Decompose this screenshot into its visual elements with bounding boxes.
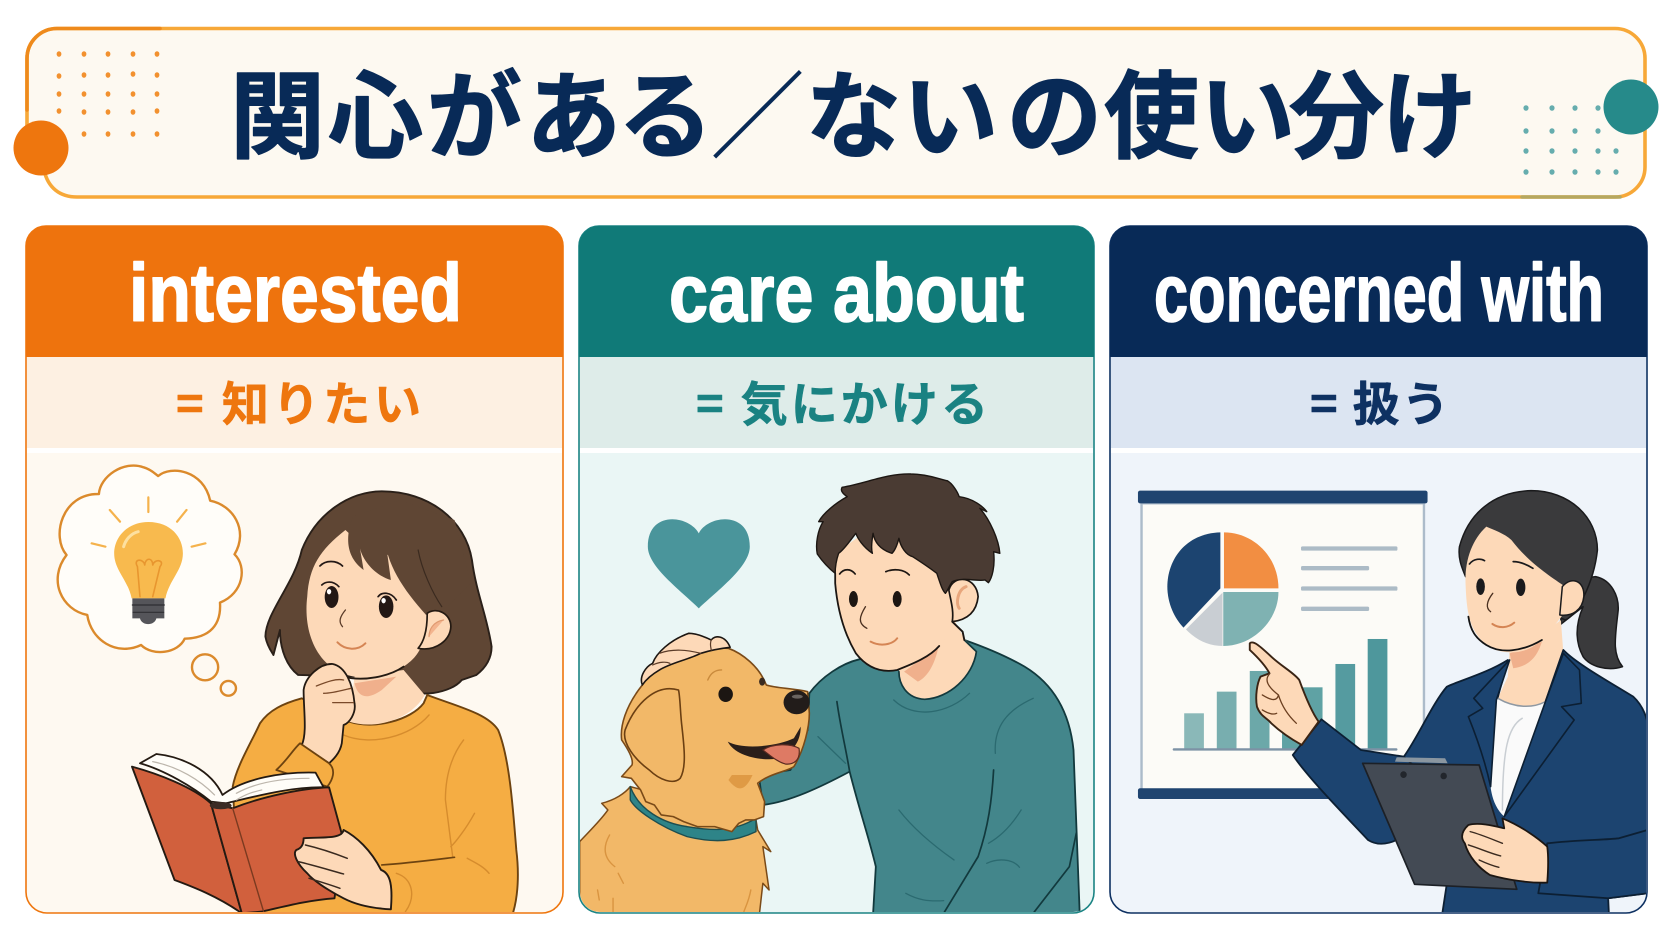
panel: interested	[26, 226, 563, 914]
ear	[418, 611, 451, 649]
meaning band	[580, 357, 1093, 448]
decorative dots left	[57, 51, 159, 137]
ear	[949, 579, 978, 622]
white shirt	[1489, 698, 1545, 817]
lower hand sleeve	[1538, 830, 1648, 898]
hair	[817, 474, 1000, 593]
meaning band	[1111, 357, 1646, 448]
pointing arm sleeve	[1293, 719, 1433, 844]
hair	[1459, 491, 1597, 620]
teal circle accent	[1604, 80, 1658, 134]
pie chart	[1167, 532, 1278, 646]
illustration: woman reading and thinking	[58, 466, 518, 914]
hand on chin	[302, 664, 355, 763]
panel: concerned with	[1110, 226, 1648, 914]
presentation screen	[1138, 491, 1428, 799]
header band	[579, 226, 1094, 357]
smile	[337, 642, 365, 649]
face	[1465, 527, 1565, 652]
neck	[349, 670, 425, 725]
jacket	[1404, 650, 1648, 914]
sweater	[759, 640, 1080, 914]
sweater	[233, 695, 518, 914]
text lines	[1301, 546, 1397, 611]
hair back	[265, 491, 492, 694]
clipboard	[1363, 757, 1517, 889]
heart icon	[648, 519, 750, 608]
collar	[630, 787, 756, 841]
neck	[1497, 620, 1563, 707]
title: 関心がある／ないの使い分け	[230, 41, 1477, 178]
eyes	[325, 586, 339, 608]
meaning band	[27, 357, 562, 448]
meaning text: = 扱う	[1310, 366, 1449, 435]
dog face	[718, 678, 810, 764]
meaning text: = 気にかける	[696, 366, 988, 435]
orange circle accent	[14, 120, 68, 176]
meaning text: = 知りたい	[176, 366, 421, 435]
dog head	[621, 648, 809, 832]
header band	[26, 226, 563, 357]
thought cloud with light bulb	[58, 466, 242, 696]
face	[306, 530, 427, 678]
hand on dog head	[641, 633, 730, 685]
heading: care about	[669, 248, 1024, 339]
eyes and mouth	[1469, 559, 1533, 627]
heading: interested	[129, 248, 462, 339]
ear	[1560, 581, 1584, 615]
panel: care about	[579, 226, 1094, 914]
title banner	[14, 28, 1658, 197]
hand holding book	[295, 830, 391, 909]
eyes and mouth	[840, 570, 909, 645]
open book	[132, 754, 343, 913]
bar chart	[1173, 639, 1397, 751]
face	[836, 537, 956, 670]
sleeve cuff	[276, 743, 333, 787]
header band	[1110, 226, 1647, 357]
neck	[899, 617, 976, 699]
ponytail	[1560, 577, 1623, 669]
illustration: presenter with chart	[1138, 491, 1648, 914]
pointing hand	[1250, 642, 1319, 745]
dog ear	[625, 689, 684, 781]
illustration: man petting dog	[580, 474, 1080, 914]
bangs	[348, 518, 456, 615]
decorative dots right	[1523, 105, 1619, 175]
dog body	[580, 787, 771, 914]
lower hand	[1462, 818, 1548, 883]
lapels	[1468, 653, 1581, 817]
